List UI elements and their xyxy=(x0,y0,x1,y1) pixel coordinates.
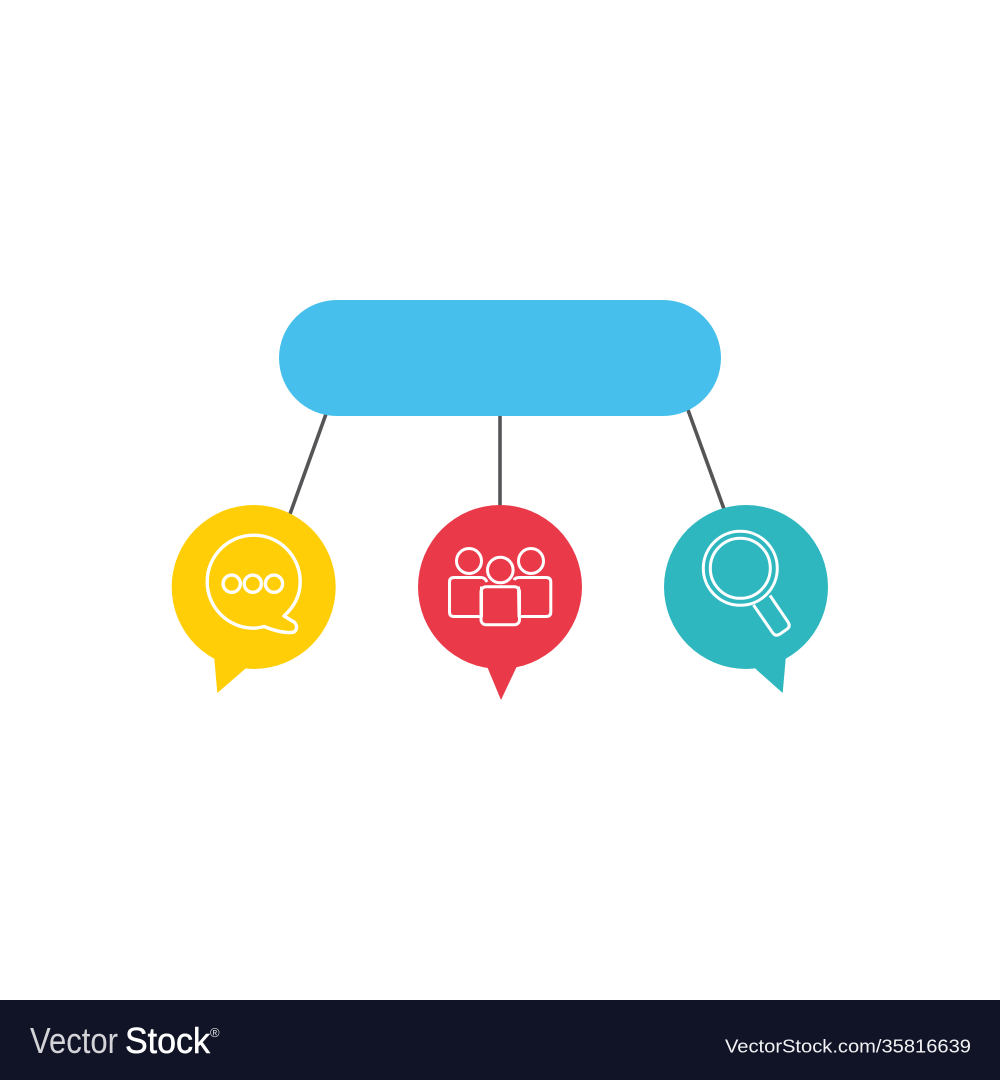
icon: group of people xyxy=(450,548,551,625)
footer bar xyxy=(0,1000,1000,1080)
footer image id: VectorStock.com/35816639 xyxy=(725,1036,971,1056)
logo: VectorStock xyxy=(30,1020,220,1061)
teal speech bubble with magnifier icon xyxy=(664,505,828,693)
logo: VectorStock: Vector xyxy=(30,1020,118,1061)
yellow speech bubble with chat icon xyxy=(172,505,336,693)
teal bubble shape xyxy=(664,505,828,693)
footer background xyxy=(0,1000,1000,1080)
icon: chat bubble xyxy=(207,535,300,633)
logo: VectorStock: Stock xyxy=(125,1020,211,1061)
yellow bubble shape xyxy=(172,505,336,693)
logo: VectorStock: ® xyxy=(210,1025,220,1040)
red speech bubble with people icon xyxy=(418,505,582,700)
blue header pill xyxy=(279,300,721,416)
connector: pill to teal bubble xyxy=(688,410,724,509)
connector: pill to yellow bubble xyxy=(290,414,326,514)
connector: pill to red bubble xyxy=(498,414,502,507)
red bubble shape xyxy=(418,505,582,700)
icon: magnifying glass xyxy=(703,531,789,635)
